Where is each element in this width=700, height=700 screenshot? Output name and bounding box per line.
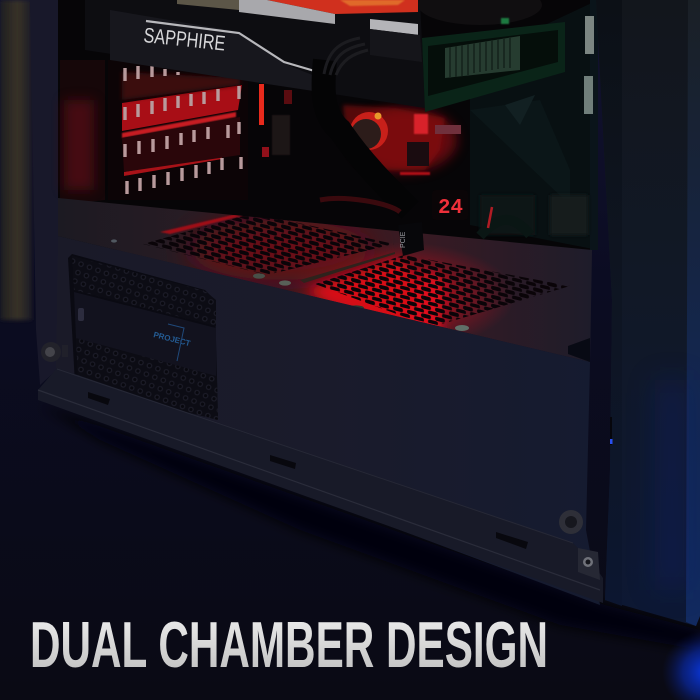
digital temperature display (432, 190, 468, 220)
perforated panel front (315, 255, 570, 327)
red light on plate (294, 245, 509, 334)
case front panel (40, 236, 600, 605)
digital temperature display: 24 (438, 197, 463, 220)
power led (610, 417, 612, 445)
psu vent cutout (68, 254, 218, 420)
perforated panel back (143, 213, 394, 275)
side panel inner strip (596, 0, 622, 606)
case bottom rail (38, 368, 603, 603)
floor shadow under case (40, 405, 700, 650)
motherboard (259, 84, 588, 235)
gpu heatsink fins (445, 36, 520, 78)
rail slots (88, 392, 110, 405)
shelf seam (300, 252, 395, 283)
pcie connector (398, 222, 424, 256)
thumb screw right (559, 510, 583, 534)
gpu green heatsink frame (422, 22, 565, 112)
red vertical led (259, 84, 264, 125)
background room wall (0, 0, 32, 320)
gpu silver strip (239, 0, 335, 24)
gpu silver block (370, 19, 418, 35)
fan hub (350, 112, 388, 150)
gpu silver line (146, 21, 318, 72)
red light streak (160, 212, 245, 234)
sticker labels (585, 16, 594, 54)
mount screws (253, 273, 265, 279)
case right side panel (568, 0, 700, 626)
cooling fan (418, 0, 542, 25)
side panel blue reflection (655, 380, 689, 590)
shelf plate (58, 198, 592, 362)
gpu backplate red top (267, 0, 418, 14)
cables (320, 38, 530, 236)
corner bracket right (578, 548, 600, 580)
expansion slot covers (108, 60, 248, 200)
gpu shroud face (110, 10, 320, 92)
blue floor glow (662, 630, 700, 700)
interior right back panel (470, 0, 598, 250)
power supply body (74, 292, 216, 376)
power supply logo (153, 324, 191, 361)
interior left wall red tint (60, 60, 105, 205)
slot ticks (125, 66, 241, 194)
vent mesh top (72, 256, 216, 326)
vrm chip (407, 142, 429, 166)
pcie connector: PCIE (400, 231, 407, 248)
red slot bands (122, 85, 242, 131)
brand text: SAPPHIRE (142, 24, 226, 56)
case left frame (30, 0, 62, 385)
graphics card (85, 0, 594, 114)
motherboard red glow (353, 108, 457, 172)
side panel front edge (686, 0, 700, 626)
gpu tan connector edge (177, 0, 239, 10)
power supply logo: PROJECT (153, 330, 191, 348)
case interior (58, 0, 598, 250)
thumb screw left (41, 342, 68, 362)
vent mesh bottom (76, 338, 218, 420)
panel corner notch (568, 338, 590, 362)
